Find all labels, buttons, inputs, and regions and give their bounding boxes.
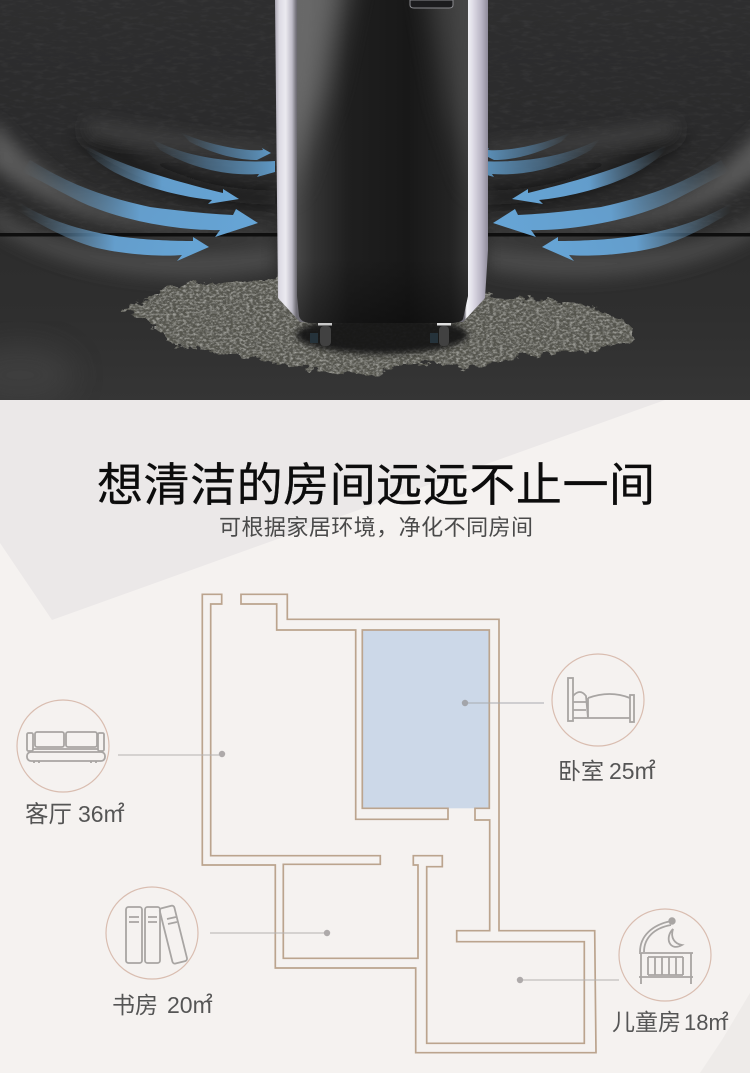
arrows left [20,132,275,261]
label: kids room: 2 [722,1009,729,1023]
wall texture [16,1,750,215]
blue bedroom fill [362,630,489,808]
label: bedroom: 2 [649,757,656,771]
label: bedroom [558,757,656,784]
air flow swirl right [487,118,750,279]
arrow 1 right [488,135,566,160]
floor [0,235,750,400]
product photo panel [0,0,750,405]
dark front panel [297,0,468,323]
front panel shading [297,280,468,323]
arrows right [476,132,731,261]
label: study: 20m [167,992,212,1018]
label: kids room: 18m [684,1010,727,1035]
right caster [430,323,451,346]
connector: kids room [517,977,619,983]
icon: bed [552,654,644,746]
title: 想清洁的房间远远不止一间 [97,459,655,511]
arrow 2 right [488,142,593,177]
arrow 5 right [542,208,725,261]
wall outline [202,594,596,1053]
background facet bottom-right [700,993,750,1073]
floor plan [202,594,596,1053]
air flow swirl left [0,118,275,279]
label: study: 2 [206,991,213,1005]
label: living room [25,800,125,827]
silver body [275,0,488,322]
label: kids room [612,1009,729,1035]
label: study: 书房 [112,992,158,1018]
icon: crib [619,909,711,1001]
connector: living room [118,751,225,757]
label: bedroom: 卧室 [558,758,604,784]
arrow 4 [22,160,258,237]
label: living room: 36m [78,801,123,827]
wall skirting line [0,233,750,236]
label: bedroom: 25m [609,758,654,784]
arrow 2 [158,142,275,177]
floor glow bottom left [0,354,57,390]
connector: study [210,930,330,936]
rug shadow [296,316,468,354]
front panel reflections [297,0,468,176]
product [275,0,488,346]
subtitle: 可根据家居环境，净化不同房间 [219,515,533,540]
label: living room: 客厅 [25,801,72,827]
arrow 1 [186,135,271,160]
icon: sofa [17,700,109,792]
back wall [0,0,750,235]
label: living room: 2 [118,800,125,814]
icon: books [106,887,198,979]
label: study [112,991,213,1018]
arrow 4 right [493,160,729,237]
connector: bedroom [462,700,544,706]
arrow 3 [85,145,239,204]
fur rug [124,277,634,376]
arrow 5 [26,208,209,261]
arrow 3 right [512,145,666,204]
left caster [310,323,332,346]
background facet top-left [0,400,665,620]
label: kids room: 儿童房 [612,1009,681,1035]
control display [410,0,453,8]
